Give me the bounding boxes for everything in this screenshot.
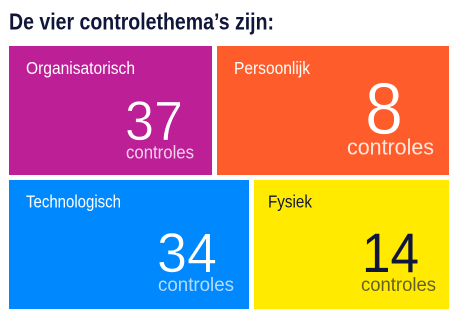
label: controles: controles [361, 274, 436, 296]
number: 8: 8 [365, 69, 403, 150]
number: 34: 34 [157, 221, 217, 284]
heading: technologisch: Technologisch [26, 192, 121, 212]
heading: persoonlijk: Persoonlijk [234, 58, 310, 78]
panel: persoonlijk [217, 46, 449, 175]
number: 14: 14 [362, 221, 419, 284]
panel: technologisch [9, 180, 249, 309]
heading: fysiek: Fysiek [268, 192, 312, 212]
label: controles: controles [158, 274, 234, 296]
label: controles: controles [126, 142, 194, 162]
panel: organisatorisch [9, 46, 212, 175]
label: controles: controles [347, 134, 434, 160]
panel: fysiek [254, 180, 449, 309]
title: De vier controlethema’s zijn: [9, 8, 274, 34]
number: 37: 37 [125, 89, 183, 152]
heading: organisatorisch: Organisatorisch [26, 58, 135, 78]
